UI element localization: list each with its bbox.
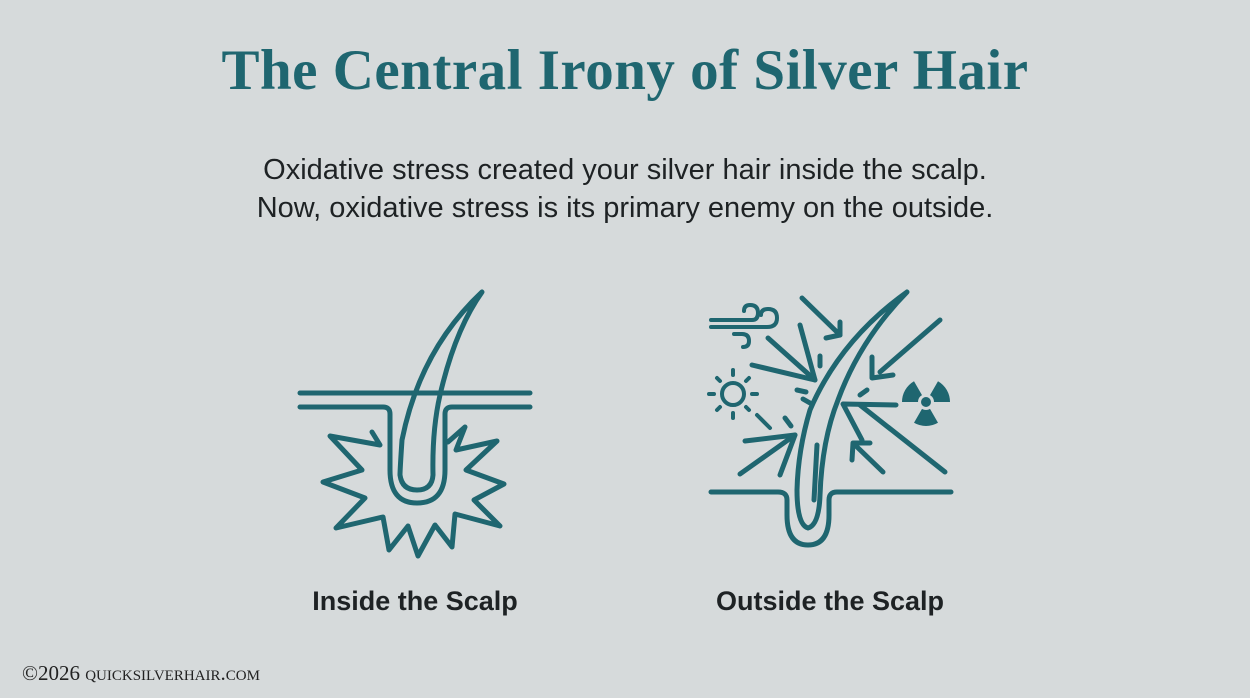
subtitle [257, 154, 993, 224]
scalp lines [300, 393, 530, 503]
label: inside: Inside the Scalp [312, 586, 518, 616]
footer: ©2026 quicksilverhair.com [22, 661, 260, 685]
radiation icon [902, 381, 950, 426]
starburst [323, 427, 504, 556]
sun icon [709, 370, 770, 428]
scalp line and follicle [711, 492, 951, 545]
subtitle: Oxidative stress created your silver hair inside the scalp. [263, 154, 987, 186]
arrows [740, 298, 945, 475]
title: The Central Irony of Silver Hair [221, 39, 1029, 102]
subtitle: Now, oxidative stress is its primary enemy on the outside. [257, 192, 993, 224]
wind icon [711, 305, 777, 347]
label: outside: Outside the Scalp [716, 586, 944, 616]
hair [797, 292, 907, 528]
hair [400, 292, 482, 490]
